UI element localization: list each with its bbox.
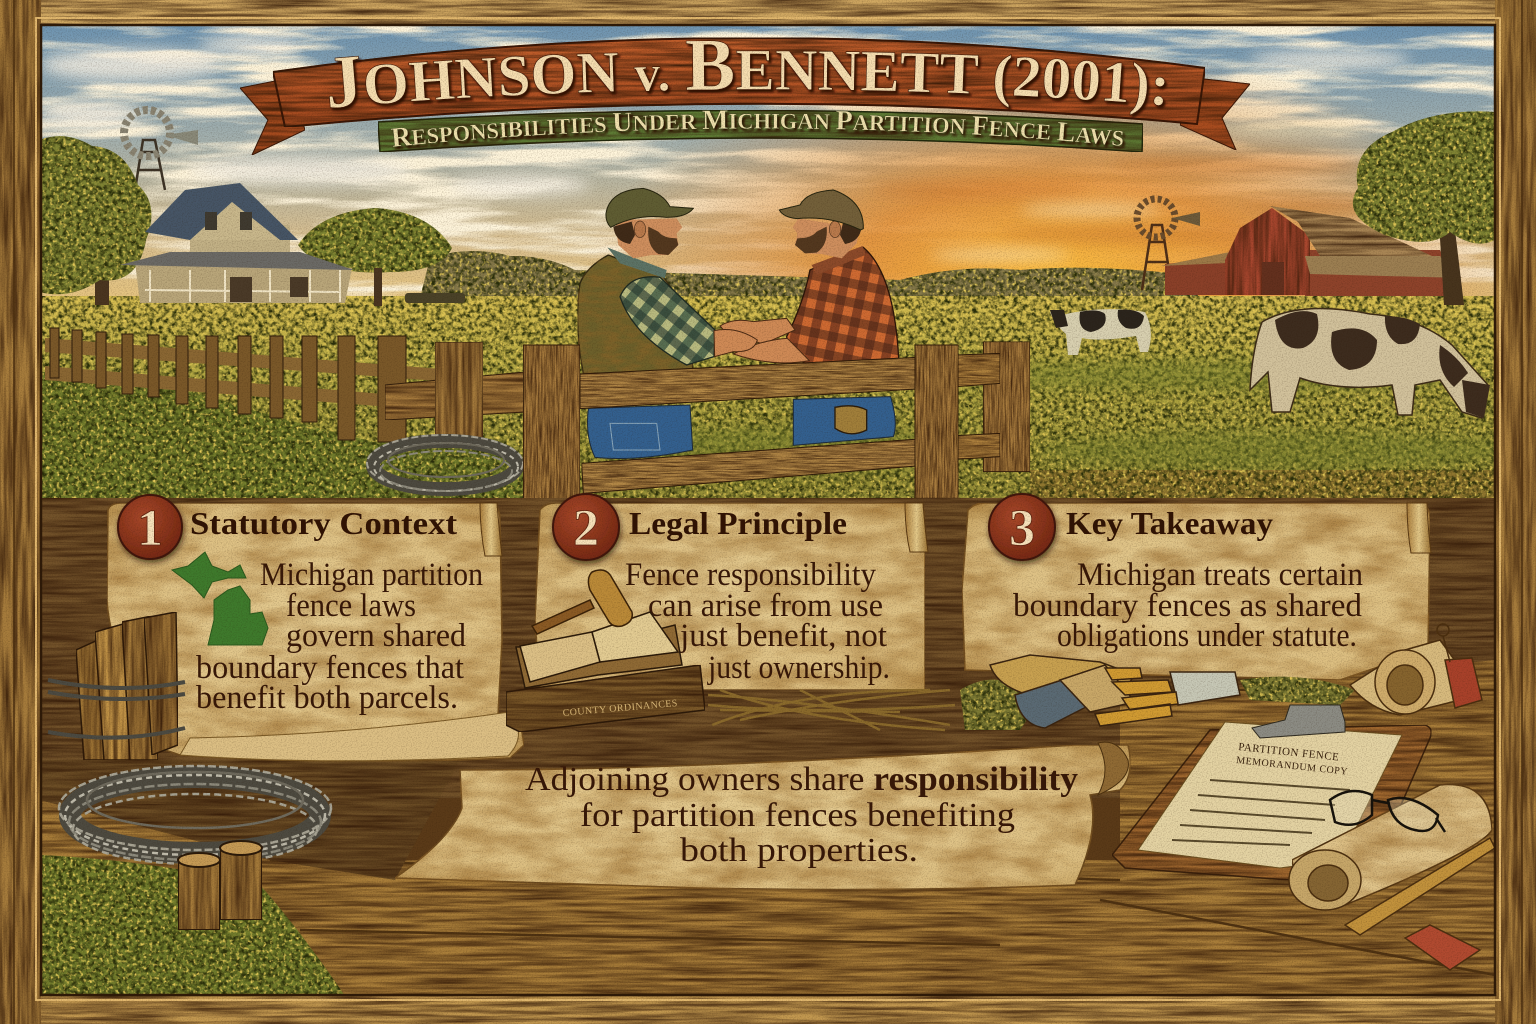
red tag [1405, 925, 1480, 970]
card text: boundary fences as shared [1013, 588, 1362, 624]
cows in pasture [1050, 309, 1490, 418]
right rail [1495, 0, 1536, 1024]
icon: left windmill [124, 110, 198, 190]
card text: Michigan partition [260, 557, 483, 593]
lower wooden wall [40, 498, 1495, 798]
table plank seams [270, 690, 1495, 975]
gavel [532, 570, 632, 634]
main title: JOHNSON v. BENNETT (2001): [329, 40, 1168, 118]
small cow [1050, 309, 1151, 355]
painted background scene [40, 25, 1520, 506]
panel: Key Takeaway [962, 494, 1431, 680]
central fence [523, 342, 1030, 500]
barn, windmill and tree on right [1137, 111, 1495, 305]
picket fence on left [45, 328, 525, 442]
panel: Legal Principle [535, 494, 928, 690]
icon: gavel on open book with ordinance volume [506, 570, 705, 732]
left tree [40, 136, 151, 305]
badge 1: 1 [137, 500, 163, 557]
card text: benefit both parcels. [196, 680, 458, 716]
farmhouse [190, 225, 290, 262]
badge 3 [989, 494, 1055, 560]
stumps [178, 841, 262, 930]
clasped hands [714, 318, 809, 363]
reading glasses [1330, 791, 1445, 832]
badge 2 [553, 494, 619, 560]
badge 3: 3 [1009, 500, 1035, 557]
left farmer [578, 188, 715, 459]
large cow [1250, 309, 1490, 418]
summary text: Adjoining owners share responsibility [525, 761, 1078, 798]
scroll curl top [480, 503, 502, 556]
distant tree line [420, 251, 1200, 298]
card text: govern shared [286, 618, 466, 654]
badge 2: 2 [573, 500, 599, 557]
left ribbon tail [240, 78, 305, 155]
panel: Statutory Context [107, 495, 524, 761]
memo heading: MEMORANDUM COPY [1236, 755, 1348, 778]
card text [1013, 557, 1363, 654]
card text: just ownership. [707, 650, 890, 686]
bottom rail [0, 995, 1536, 1024]
scroll curl top [905, 503, 928, 552]
grass tufts beneath takeaway panel [960, 677, 1355, 730]
scroll curl [1098, 742, 1128, 795]
two farmers shaking hands at fence [523, 188, 1030, 500]
card text: just benefit, not [679, 618, 887, 654]
icon: work gloves [990, 655, 1240, 728]
summary text: both properties. [680, 832, 918, 869]
card text: can arise from use [648, 588, 883, 624]
badge 1 [118, 495, 182, 559]
dark wall below scrolls [40, 760, 460, 880]
card text: boundary fences that [196, 650, 464, 686]
bundled fence posts with barbed wire [48, 612, 185, 760]
scroll curl bottom [180, 712, 519, 761]
farmhouse with windmill and trees [40, 110, 465, 306]
card text: obligations under statute. [1057, 618, 1357, 654]
right ribbon tail [1180, 78, 1250, 150]
card text [625, 557, 890, 686]
card text: Fence responsibility [625, 557, 876, 593]
heading: Statutory Context [190, 505, 457, 541]
rolled paper with red tag [1350, 624, 1482, 715]
card text [196, 557, 483, 716]
law book [506, 612, 705, 732]
warm foreground meadow right [1030, 470, 1495, 502]
red barn [1165, 257, 1240, 295]
summary text: for partition fences benefiting [580, 797, 1015, 834]
left rail [0, 0, 41, 1024]
top rail [0, 0, 1536, 25]
clipboard clip [1252, 705, 1345, 738]
heading: Key Takeaway [1066, 505, 1273, 541]
foreground shrubs [40, 372, 530, 505]
clipboard with fence memo [1112, 705, 1431, 880]
subtitle: RESPONSIBILITIES UNDER MICHIGAN PARTITION FENCE LAWS [390, 110, 1126, 150]
wooden table top [40, 660, 1495, 996]
meadow bottom-left foreground [40, 855, 345, 996]
spine text: COUNTY ORDINANCES [562, 698, 678, 719]
right farmer [779, 190, 899, 445]
soft crop rows [600, 359, 1520, 474]
small tree [298, 208, 452, 306]
coil of wire lower left [59, 766, 331, 864]
meadow field [40, 296, 1495, 506]
bundle of twigs [708, 690, 955, 730]
icon: Michigan map [172, 552, 268, 645]
card text: Michigan treats certain [1077, 557, 1363, 593]
farm truck [405, 293, 465, 303]
memo heading [1236, 741, 1348, 778]
rolled plans and pencil [1289, 785, 1495, 970]
card text: fence laws [286, 588, 416, 624]
panel: bottom summary scroll [395, 742, 1130, 889]
right tree [1353, 111, 1495, 305]
heading: Legal Principle [629, 505, 847, 541]
coil of barbed wire on the ground [367, 435, 523, 491]
green sub-ribbon [378, 110, 1143, 152]
title banner [240, 38, 1250, 155]
scroll curl top [1407, 503, 1431, 553]
memo heading: PARTITION FENCE [1238, 741, 1340, 764]
summary text [525, 761, 1078, 869]
icon: right windmill [1137, 199, 1200, 290]
wooden title board [273, 38, 1205, 127]
sky [40, 25, 1495, 310]
